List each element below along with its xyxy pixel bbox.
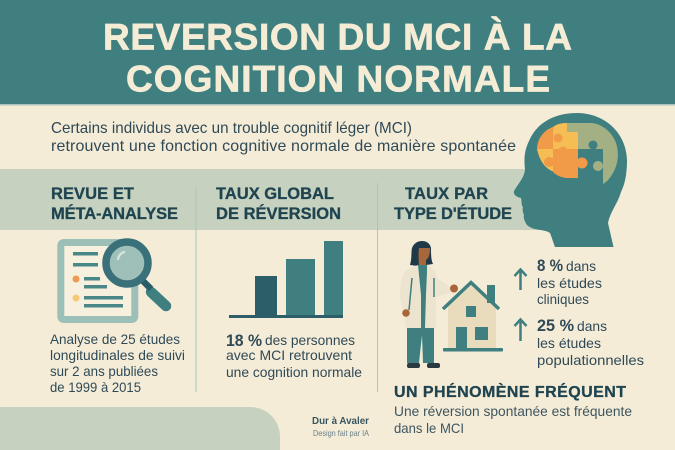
section header band (0, 169, 540, 230)
heading: taux par type d'étude: TAUX PAR (405, 185, 488, 203)
text: 18 %: avec MCI retrouvent (226, 347, 352, 363)
stat: 8 % (514, 256, 602, 307)
trousers (407, 322, 434, 363)
title banner: REVERSION DU MCI À LA (103, 16, 572, 58)
hair (410, 241, 433, 266)
stat: 8 %: 8 % (537, 256, 563, 275)
puzzle: yellow pieces (537, 123, 578, 172)
text: analyse (50, 331, 185, 395)
heading: revue et méta-analyse: REVUE ET (51, 185, 134, 203)
puzzle: teal cut-out (578, 140, 603, 161)
conclusion: Une réversion spontanée est fréquente (394, 403, 632, 419)
bar chart (229, 241, 343, 318)
stat: 25 %: dans (577, 318, 607, 334)
stat: 25 %: 25 % (537, 316, 574, 335)
credit: Design fait par IA (313, 428, 369, 438)
text: analyse: sur 2 ans publiées (50, 363, 158, 379)
lab coat (400, 265, 450, 328)
heading: taux par type d'étude (394, 185, 512, 223)
intro text (51, 120, 516, 155)
icon: head with puzzle brain (514, 113, 627, 247)
text: 18 % (226, 331, 362, 380)
column dividers (196, 183, 378, 392)
heading: taux global (216, 185, 341, 223)
stat: 25 % (514, 316, 644, 368)
heading: revue et méta-analyse (51, 185, 178, 223)
intro text: Certains individus avec un trouble cognitif léger (MCI) (51, 120, 412, 137)
stat: 25 %: populationnelles (537, 352, 644, 368)
credit (312, 415, 369, 438)
shoes (407, 363, 420, 368)
illustration: house (443, 282, 503, 352)
stat: 8 %: les études (537, 275, 602, 291)
text: analyse: Analyse de 25 études (50, 331, 180, 347)
footer panel (0, 407, 280, 450)
conclusion (394, 382, 632, 436)
text: 18 %: une cognition normale (226, 364, 362, 380)
intro text: retrouvent une fonction cognitive normale de manière spontanée (51, 138, 516, 155)
illustration: doctor (400, 241, 458, 368)
heading: revue et méta-analyse: MÉTA-ANALYSE (51, 204, 178, 223)
hands (402, 309, 410, 317)
title banner (0, 0, 675, 106)
heading: taux global: TAUX GLOBAL (216, 185, 334, 203)
text: 18 %: des personnes (265, 332, 355, 348)
puzzle: orange pieces (537, 127, 588, 178)
text: 18 %: 18 % (226, 331, 262, 350)
heading: taux par type d'étude: TYPE D'ÉTUDE (394, 204, 512, 223)
credit: Dur à Avaler (312, 415, 369, 427)
stat: 8 %: dans (566, 258, 596, 274)
face (419, 248, 430, 268)
title banner: COGNITION NORMALE (126, 58, 550, 100)
text: analyse: de 1999 à 2015 (50, 379, 141, 395)
stat: 8 %: cliniques (537, 291, 589, 307)
puzzle: green piece (567, 123, 618, 184)
text: analyse: longitudinales de suivi (50, 347, 185, 363)
heading: taux global: DE RÉVERSION (216, 204, 341, 223)
stat: 25 %: les études (537, 335, 601, 351)
conclusion: dans le MCI (394, 420, 464, 436)
icon: document with magnifying glass (61, 242, 166, 320)
conclusion: UN PHÉNOMÈNE FRÉQUENT (394, 382, 626, 401)
scrubs (418, 265, 427, 328)
